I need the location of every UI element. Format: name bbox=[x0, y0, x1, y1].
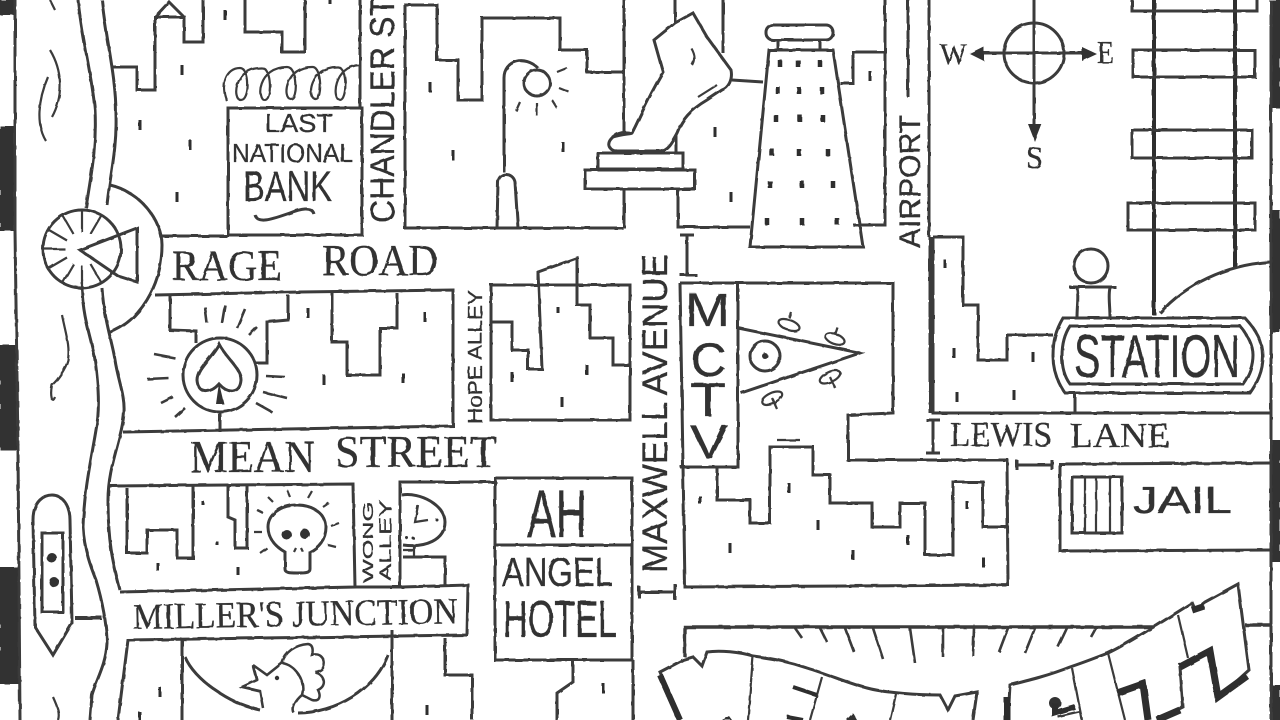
mctv block: V bbox=[690, 415, 729, 468]
railway tracks bbox=[1128, 0, 1270, 315]
street end marker bbox=[639, 235, 697, 600]
right checkered border bbox=[1270, 0, 1280, 720]
jail bbox=[1017, 460, 1272, 551]
angel hotel bbox=[495, 476, 633, 720]
icon: spade sign bbox=[147, 305, 287, 432]
lewis lane label: LEWIS bbox=[950, 415, 1052, 454]
foot statue backdrop bbox=[675, 0, 763, 227]
icon: skull bbox=[254, 490, 339, 573]
last national bank bbox=[228, 108, 362, 235]
wong alley label bbox=[360, 500, 395, 583]
icon: compass: S bbox=[1026, 139, 1043, 175]
icon: clock bbox=[400, 482, 497, 587]
station sign bbox=[1053, 318, 1263, 413]
left checkered border bbox=[0, 0, 20, 720]
hope alley label: HoPE ALLEY bbox=[465, 290, 487, 424]
mctv block: M bbox=[685, 283, 730, 336]
water squiggles bbox=[39, 0, 69, 720]
airport road label bbox=[894, 0, 930, 413]
lewis lane label: LANE bbox=[1070, 416, 1170, 455]
title banner: left part bbox=[660, 625, 1272, 720]
wong alley label: ALLEY bbox=[376, 500, 395, 581]
airport road label: AIRPORT bbox=[894, 115, 927, 248]
rage road label bbox=[172, 236, 438, 290]
last national bank: BANK bbox=[243, 163, 332, 211]
roundabout with fountain bbox=[43, 185, 162, 333]
miller's junction label: MILLER'S JUNCTION bbox=[132, 591, 458, 638]
icon: compass: E bbox=[1097, 34, 1114, 70]
mctv block bbox=[680, 283, 1008, 587]
wong alley label: WONG bbox=[360, 502, 377, 583]
hope alley block bbox=[491, 258, 630, 420]
jail: JAIL bbox=[1133, 480, 1232, 522]
icon: rooster bbox=[242, 644, 324, 713]
last national bank: LAST bbox=[265, 108, 333, 138]
icon: boat bbox=[33, 495, 102, 655]
angel hotel: AH bbox=[527, 476, 587, 552]
river road bbox=[78, 0, 124, 720]
angel hotel: HOTEL bbox=[503, 591, 617, 649]
mctv block: C bbox=[691, 333, 726, 386]
mean street label bbox=[190, 426, 497, 482]
icon: tower bbox=[750, 25, 863, 247]
mctv block: T bbox=[690, 373, 726, 426]
title banner: right part bbox=[1007, 584, 1249, 720]
angel hotel: ANGEL bbox=[502, 549, 613, 595]
rage road label: ROAD bbox=[322, 236, 438, 285]
icon: compass: W bbox=[940, 38, 968, 71]
rage road label: RAGE bbox=[172, 243, 282, 290]
upper centre block with lamp bbox=[405, 0, 624, 228]
station block skyline bbox=[933, 237, 1272, 413]
icon: compass bbox=[940, 0, 1114, 175]
mean street label: STREET bbox=[335, 426, 497, 477]
lewis lane label bbox=[926, 415, 1170, 455]
last national bank: NATIONAL bbox=[232, 138, 353, 168]
icon: station lamp bbox=[1069, 249, 1116, 318]
icon: foot statue bbox=[585, 13, 731, 189]
rooster block bbox=[182, 630, 472, 720]
right skyline beside tower bbox=[840, 0, 885, 225]
icon: broadcast dish bbox=[738, 312, 860, 409]
upper left skyline bbox=[113, 0, 360, 236]
icon: street lamp bbox=[497, 61, 569, 228]
bank barbed coil bbox=[224, 65, 360, 101]
skull block bbox=[108, 484, 355, 592]
window ticks bbox=[140, 0, 1033, 720]
maxwell avenue label: MAXWELL AVENUE bbox=[636, 254, 675, 573]
spade block bbox=[123, 290, 453, 432]
mean street label: MEAN bbox=[190, 431, 315, 482]
miller's junction label bbox=[118, 585, 468, 720]
